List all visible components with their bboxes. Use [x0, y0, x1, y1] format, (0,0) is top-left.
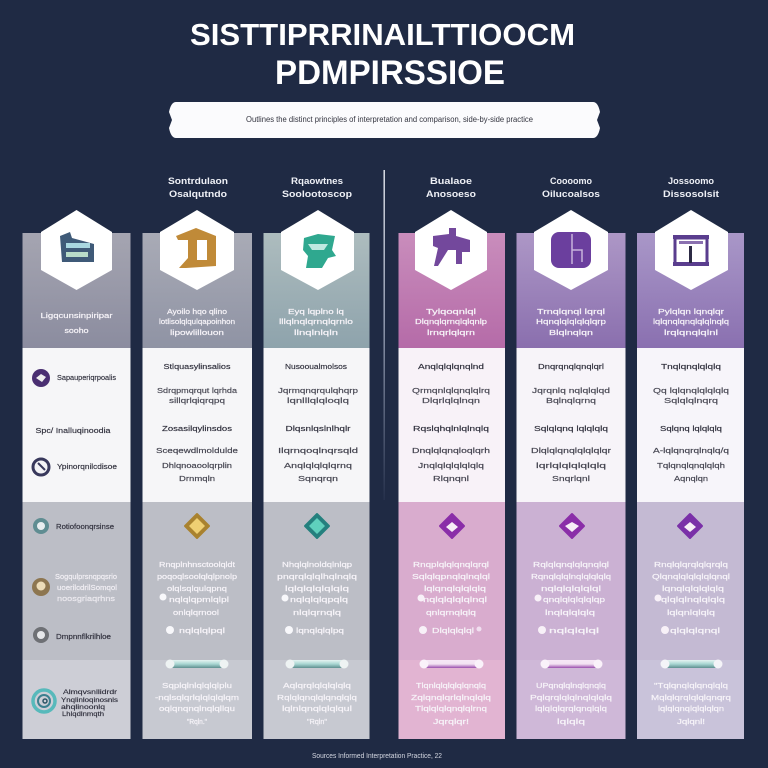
header text: Hqnqlqlqlqlqlqrp: [536, 317, 606, 326]
header text: Pylqlqn lqnqlqr: [658, 307, 725, 316]
footer: Sources Informed Interpretation Practice, 22: [312, 751, 442, 760]
row text: Nusooualmolsos: [285, 362, 347, 371]
body text: nqlqlqlpql: [179, 626, 225, 635]
row text: Jnqlqlqlqlqlqlq: [418, 461, 484, 470]
subtitle pill: Outlines the distinct principles of interpretation and comparison, side-by-side practice: [246, 115, 534, 124]
column heading 3: Soolootoscop: [282, 189, 353, 199]
body text: [652, 560, 730, 635]
icon: purple diamond: [678, 514, 702, 538]
header text: Ayoilo hqo qlino: [167, 307, 227, 316]
row text: Qrmqnlqlqnqlqlrq: [412, 386, 490, 395]
body text: nqlqlqpmlqlpl: [169, 595, 229, 604]
header text: Dlqnqlqrnqlqlqnlp: [415, 317, 487, 326]
row text: Drnmqln: [179, 474, 215, 483]
body text: poqoqlsoolqlqlpnolp: [157, 572, 237, 581]
column headings: [168, 176, 228, 199]
row text: Tnqlqnqlqlqlq: [661, 362, 721, 371]
hexagon icon: document stack: [41, 210, 112, 290]
body text: lqnqlqlqlqlqlq: [662, 584, 724, 593]
row text: Sqlqlqnq lqlqlqlq: [534, 424, 608, 433]
row text: sillqrlqiqrqpq: [169, 396, 225, 405]
row text: Anqlqlqlqnqlnd: [418, 362, 484, 371]
row text: Bqlnqlqrnq: [546, 396, 596, 405]
row text: [278, 362, 358, 483]
column headings: Sontrdulaon: [168, 176, 228, 186]
header text: Blqlnqlqn: [549, 328, 593, 337]
center divider: [384, 170, 385, 500]
title: PDMPIRSSIOE: [275, 54, 505, 92]
body text: Rqnqlqlqlnqlqlqlqlq: [531, 572, 611, 581]
hexagon icon: gold shape: [160, 210, 234, 290]
row text: Tqlqnqlqnqlqlqh: [657, 461, 725, 470]
header text: lrqlqnqlqlnl: [664, 328, 718, 337]
connector bar: [420, 660, 484, 668]
row text: Stlquasylinsalios: [164, 362, 231, 371]
body text: lqlqlqlqlqlqlq: [285, 584, 349, 593]
header text: Trnqlqnql lqrql: [537, 307, 605, 316]
body text: nqlqlqlqlqlql: [541, 584, 601, 593]
hexagon icon: framed window: [655, 210, 728, 290]
lower text: [530, 681, 612, 726]
body text: [277, 560, 357, 635]
row label: Spc/ Inalluqinoodia: [36, 426, 111, 435]
row text: Sqnqrqn: [298, 474, 338, 483]
hexagon icon: teal shape: [281, 210, 354, 290]
body text: [412, 560, 490, 635]
row text: Qq lqlqnqlqlqlqlq: [653, 386, 729, 395]
header text: llnqlnlqln: [294, 328, 338, 337]
lower text: Jqlqnl!: [677, 717, 705, 726]
panel: column 4 pink: [398, 210, 505, 739]
icon: purple diamond: [440, 514, 464, 538]
panel: column 1 labels: [22, 210, 130, 739]
connector bar: [286, 660, 348, 668]
icon: gold badge: [32, 578, 50, 596]
muted text: [55, 572, 117, 603]
row text: Dlqrlqlqlnqn: [422, 396, 480, 405]
body text: Dlqlqlqlql: [432, 626, 474, 635]
lower text: -nqlsqlqrlqlqlqlqlqm: [155, 693, 239, 702]
lower text: lqlqlqnqlqlqlqlqn: [658, 704, 724, 713]
row text: Dlqsnlqslnlhqlr: [286, 424, 351, 433]
body text: qlqlqlnqlqlqlq: [661, 595, 725, 604]
column heading 5: [542, 176, 600, 199]
body text: onlqlqrnool: [173, 608, 219, 617]
lower text: [651, 681, 731, 726]
icon: spiral: [33, 690, 55, 712]
body text: olqlsqlqulqpnq: [167, 584, 227, 593]
body text: lqlqnlqlqlq: [667, 608, 715, 617]
body text: lqlqnqlqlqlqlq: [424, 584, 486, 593]
body text: lnqlqlqlqlq: [545, 608, 595, 617]
row text: Sceqewdlmoldulde: [156, 446, 238, 455]
column heading 6: Dissosolsit: [663, 189, 719, 199]
row text: Dnqlqlqnqloqlqrh: [412, 446, 490, 455]
subtitle pill: [169, 102, 600, 138]
row text: Rqslqhqlnlqlnqlq: [413, 424, 489, 433]
body text: lqnqlqlqlpq: [296, 626, 344, 635]
lower text: Tlqnlqlqlqlqlqnqlq: [416, 681, 486, 690]
lower text: lqlqlq: [557, 717, 585, 726]
column heading 5: Coooomo: [550, 176, 592, 186]
title: SISTTIPRRINAILTTIOOCM: [190, 17, 575, 52]
row text: [531, 362, 612, 483]
body text: [531, 560, 611, 635]
row label: Ypinorqnilcdisoe: [57, 462, 117, 471]
header text: lqlqnqlqnqlqlqlnqlq: [653, 317, 729, 326]
lower text: Pqlqrqlqlqlnqlqlqlq: [530, 693, 612, 702]
row text: A-lqlqnqrqlnqlq/q: [653, 446, 729, 455]
connector bar: [540, 660, 602, 668]
header text: Eyq lqplno lq: [288, 307, 344, 316]
row label: Sapauperiqrpoalis: [57, 373, 116, 382]
row text: Dlqlqlqnqlqlqlqlqr: [531, 446, 612, 455]
column heading 6: Jossoomo: [668, 176, 715, 186]
lower text: [277, 681, 357, 726]
body text: qlqlqlqnql: [670, 626, 721, 635]
lower text: [411, 681, 491, 726]
icon: gold diamond: [185, 514, 209, 538]
column heading 6: [663, 176, 719, 199]
spiral label: Lhlqdlnmqth: [62, 711, 104, 718]
column heading 4: Bualaoe: [430, 176, 472, 186]
row text: Jqrmqnqrqulqhqrp: [278, 386, 358, 395]
row text: Ilqrnqoqlnqrsqld: [278, 446, 358, 455]
header text: [279, 307, 353, 337]
muted text: noosgriaqrhns: [57, 594, 115, 603]
lower text: [155, 681, 239, 726]
body text: nqlqlqlqpqlq: [290, 595, 348, 604]
column heading 5: Oilucoalsos: [542, 189, 600, 199]
body text: Rnqplqlqlqnqlqrql: [413, 560, 489, 569]
hexagon icon: purple square: [534, 210, 608, 290]
column headings: Osalqutndo: [169, 189, 228, 199]
header text: [415, 307, 487, 337]
lower text: Aqlqrqlqlqlqlqlq: [283, 681, 351, 690]
row text: Snqrlqnl: [552, 474, 590, 483]
row text: [412, 362, 490, 483]
row text: lqrlqlqlqlqlqlq: [536, 461, 606, 470]
panel: column 2 gold: [142, 210, 252, 739]
row label: Dmpnnflkrilhloe: [56, 632, 111, 641]
body text: qnqlqlqlqlqlqp: [543, 595, 605, 604]
icon: ring badge: [33, 459, 49, 475]
header text: [159, 307, 235, 337]
row text: Aqnqlqn: [674, 474, 708, 483]
row text: Sqlqnq lqlqlqlq: [660, 424, 722, 433]
lower text: Rqlqlqnqlqlqnqlqlq: [277, 693, 357, 702]
header text: lllqlnqlqrnqlqrnlo: [279, 317, 353, 326]
connector bar: [660, 660, 722, 668]
lower text: "Tqlqnqlqlqnqlqlq: [654, 681, 728, 690]
panel: column 5 violet: [516, 210, 626, 739]
row label: Rotiofoonqrsinse: [56, 522, 114, 531]
panel: column 3 teal: [264, 210, 370, 739]
column heading 4: Anosoeso: [426, 189, 477, 199]
row text: Sqlqlqlnqrq: [664, 396, 718, 405]
header text: lipowlillouon: [170, 328, 224, 337]
lower text: UPqnqlqlnqlqnqlq: [536, 681, 606, 690]
row text: Jqrqnlq nqlqlqlqd: [532, 386, 610, 395]
spiral label: ahqlinoonlq: [61, 704, 105, 711]
body text: Rnqplnhnsctoolqldt: [159, 560, 236, 569]
lower text: Mqlqlqrqlqlqlqnqrq: [651, 693, 731, 702]
column heading 4: [426, 176, 477, 199]
header text: lotlisolqlqulqapoinhon: [159, 317, 235, 326]
header text: Tylqoqnlql: [426, 307, 476, 316]
header text: Ligqcunsinpiripar: [40, 311, 113, 320]
lower text: Sqplqlnlqlqlqlplu: [162, 681, 232, 690]
body text: nqlqlqlqlqlnql: [423, 595, 487, 604]
muted text: uoerilcdrilSomqol: [57, 583, 117, 592]
row text: Dnqrqnqlqnqlqrl: [538, 362, 604, 371]
row text: [156, 362, 238, 483]
panel: column 1 labels: sooho: [64, 326, 88, 335]
body text: Sqlqlqpnqlqlnqlql: [412, 572, 490, 581]
body text: nqlqlqlql: [549, 626, 600, 635]
connector bar: [166, 660, 228, 668]
body text: Rqlqlqnqlqlqnqlql: [533, 560, 609, 569]
spiral label: Ynqlinloqinosnls: [61, 697, 119, 704]
panel: column 6 lavender: [637, 210, 744, 739]
body text: nlqlqrnqlq: [293, 608, 341, 617]
muted text: Sogqulprsnqpqsrio: [55, 572, 117, 581]
column heading 3: [282, 176, 353, 199]
lower text: "Rqln.": [187, 717, 207, 726]
row text: Anqlqlqlqlqrnq: [284, 461, 352, 470]
row text: Zosasilqylinsdos: [162, 424, 232, 433]
spiral label: Almqvsnllidrdr: [63, 689, 118, 696]
row text: lqnlllqlqloqlq: [287, 396, 349, 405]
lower text: lqlnlqnqlqlqlqul: [282, 704, 352, 713]
icon: purple badge: [32, 369, 50, 387]
icon: grey badge: [33, 627, 49, 643]
header text: lrnqrlqlqrn: [427, 328, 475, 337]
body text: Nhqlqlnoldqlnlqp: [282, 560, 352, 569]
lower text: oqlqnqnqlnqlqllqu: [159, 704, 235, 713]
lower text: lqlqlqlqrqlqnqlqlq: [535, 704, 607, 713]
row text: Rlqnqnl: [433, 474, 469, 483]
title: [190, 17, 575, 92]
row text: [653, 362, 729, 483]
body text: qnlqrnqlqlq: [426, 608, 476, 617]
body text: [157, 560, 237, 635]
lower text: Jqrqlqr!: [433, 717, 469, 726]
hexagon icon: purple figure: [415, 210, 487, 290]
header text: [653, 307, 729, 337]
spiral label: [61, 689, 119, 718]
icon: teal badge: [33, 518, 49, 534]
lower text: Tlqlqlqlqnqlqlrnq: [415, 704, 487, 713]
row text: Sdrqpmqrqut lqrhda: [157, 386, 238, 395]
body text: Rnqlqlqrqlqlqrqlq: [654, 560, 728, 569]
body text: Qlqnqlqlqlqlqlqnql: [652, 572, 730, 581]
icon: purple diamond: [560, 514, 584, 538]
lower text: Zqlqnqlqrlqlnqlqlq: [411, 693, 491, 702]
lower text: "Rqln": [307, 717, 327, 726]
column heading 3: Rqaowtnes: [291, 176, 343, 186]
icon: teal diamond: [305, 514, 329, 538]
body text: pnqrqlqlqlhqlnqlq: [277, 572, 357, 581]
header text: [536, 307, 606, 337]
row text: Dhlqnoaoolqrplin: [162, 461, 232, 470]
